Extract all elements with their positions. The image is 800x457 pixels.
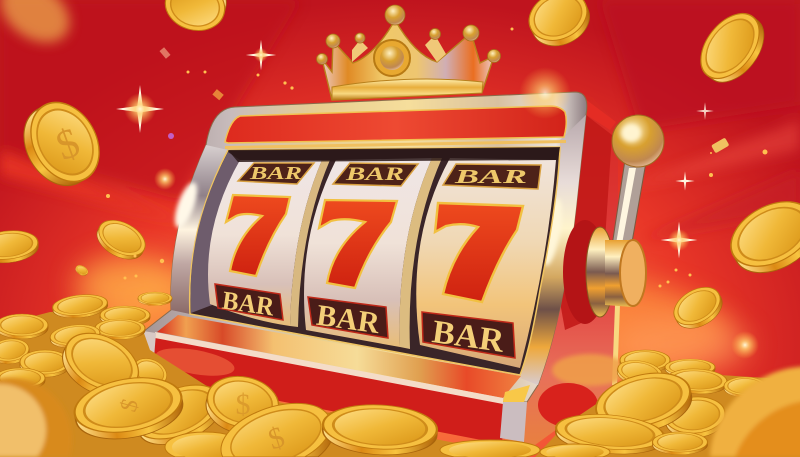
reel 2 seven — [319, 200, 397, 288]
reel 1 — [208, 160, 330, 327]
frame left post — [171, 145, 228, 314]
reel 3 seven — [435, 203, 523, 302]
reel 2 bottom BAR: BAR — [315, 299, 382, 340]
lever — [563, 115, 664, 324]
coin pile: left: $ — [116, 396, 144, 415]
frame bottom-left corner — [141, 331, 156, 358]
machine side panel — [505, 92, 618, 445]
sparkles and glints — [106, 28, 768, 359]
crown body — [322, 20, 494, 100]
frame gold bar — [225, 140, 566, 149]
lever hub barrel — [605, 240, 638, 307]
reel 2 divider — [400, 158, 442, 349]
lever hub flange — [586, 227, 614, 317]
top panel red — [225, 106, 566, 143]
side gold trim — [612, 305, 620, 385]
coin pile: centre: $ — [264, 420, 289, 456]
reel 3 — [416, 158, 556, 368]
base reflection — [154, 343, 236, 381]
reel 3 bottom BAR: BAR — [430, 314, 507, 360]
reel 3 top BAR: BAR — [453, 166, 527, 188]
base highlight line — [155, 332, 503, 404]
side orange reflection — [552, 354, 628, 386]
crown — [316, 5, 500, 100]
reel 1 top BAR — [238, 163, 314, 184]
lever rod — [612, 160, 646, 248]
machine top side strip — [576, 92, 616, 130]
base front panel — [145, 333, 505, 444]
reel window — [190, 147, 560, 375]
frame gold post accent — [503, 385, 530, 402]
coin pile: right — [540, 350, 766, 457]
lever ball highlight — [621, 124, 641, 142]
flying coins — [0, 0, 800, 336]
coin pile: left — [0, 292, 283, 457]
flying coins: $ — [50, 120, 86, 170]
reel 1 bottom BAR: BAR — [220, 286, 276, 322]
crown band — [332, 79, 483, 100]
lever hub back shadow — [563, 220, 607, 324]
crown rear points — [352, 35, 446, 62]
side red bulge — [538, 383, 598, 427]
lever ball — [612, 115, 664, 167]
reel 1 seven — [226, 195, 290, 276]
frame bottom-right post — [500, 402, 527, 442]
crown gem — [374, 40, 410, 76]
crown base glint — [519, 67, 571, 119]
coin pile backing: deep gold shadow — [0, 308, 800, 457]
coin pile: centre — [221, 402, 540, 457]
lever hub opening — [620, 240, 646, 306]
lever rod highlight — [616, 168, 636, 244]
coin pile: left: $ — [236, 388, 250, 421]
reel 2 top BAR: BAR — [344, 164, 404, 185]
window top shadow — [228, 147, 560, 162]
reel 2 top BAR — [333, 163, 418, 186]
blurred foreground coin: bottom-left — [0, 378, 72, 457]
chrome frame — [143, 92, 587, 402]
reel 3 top BAR — [443, 164, 541, 189]
base platform top — [157, 315, 521, 398]
blurred foreground coin: bottom-right — [710, 366, 800, 457]
crown balls — [316, 5, 500, 64]
slot machine — [141, 92, 628, 445]
frame right post — [520, 115, 586, 385]
reel 1 top BAR: BAR — [249, 163, 302, 183]
reel 1 divider — [290, 160, 330, 327]
window left mauve wall — [190, 152, 240, 313]
reel 2 — [304, 158, 442, 349]
side shading — [556, 112, 612, 330]
blurred coin: top-left foreground — [0, 0, 81, 55]
frame highlight — [538, 197, 566, 267]
